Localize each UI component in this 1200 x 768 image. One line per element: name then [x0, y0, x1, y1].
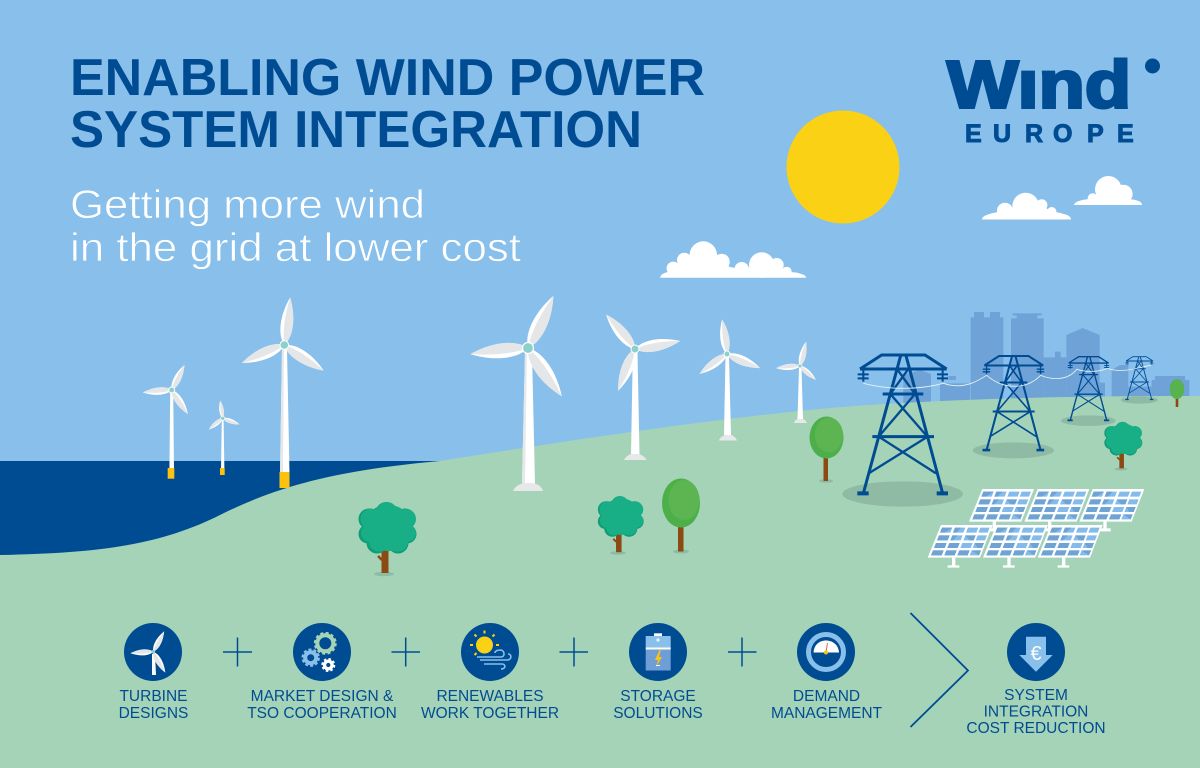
turbine 7 onshore — [776, 341, 818, 423]
pylons and power lines — [842, 355, 1158, 507]
sea — [0, 461, 560, 571]
cloud: right upper — [1074, 176, 1142, 205]
label: STORAGE — [620, 688, 696, 705]
title: ENABLING WIND POWER — [70, 49, 705, 107]
ground — [0, 396, 1200, 768]
trees: green round — [662, 379, 1184, 554]
label: TURBINE — [119, 688, 188, 705]
icon: battery — [629, 623, 687, 681]
title: SYSTEM INTEGRATION — [70, 101, 642, 159]
arrow: chevron — [910, 613, 968, 727]
title — [70, 49, 705, 159]
label: WORK TOGETHER — [421, 705, 559, 722]
step: storage solutions — [613, 623, 703, 722]
step: turbine designs — [119, 623, 188, 722]
subtitle: in the grid at lower cost — [70, 226, 521, 270]
turbine 3 offshore — [240, 297, 327, 488]
trees: teal — [358, 422, 1142, 576]
turbine 2 offshore — [207, 400, 240, 475]
plus signs — [223, 638, 756, 666]
label: INTEGRATION — [984, 704, 1088, 720]
icon: gauge — [797, 623, 855, 681]
label: COST REDUCTION — [966, 720, 1106, 737]
solar panel supports back row — [987, 522, 1111, 531]
label: DESIGNS — [119, 705, 188, 722]
pylon 2 — [983, 356, 1044, 450]
label: SOLUTIONS — [613, 705, 703, 722]
logo: WindEurope: Wind — [947, 48, 1131, 122]
sun — [786, 110, 900, 224]
label: MARKET DESIGN & — [251, 688, 394, 705]
subtitle — [70, 183, 521, 270]
icon: sun and wind — [461, 623, 519, 681]
turbine 1 offshore — [142, 363, 191, 479]
pylon 4 — [1125, 357, 1153, 400]
label: RENEWABLES — [436, 688, 544, 705]
result: system integration cost reduction — [966, 623, 1106, 737]
pylon shadows — [842, 396, 1158, 507]
cloud: right lower — [982, 193, 1071, 220]
label: TSO COOPERATION — [247, 705, 397, 722]
logo: WindEurope — [947, 48, 1160, 148]
icon: turbine — [124, 623, 182, 681]
turbine 5 onshore — [602, 311, 681, 460]
label: DEMAND — [793, 688, 860, 705]
subtitle: Getting more wind — [70, 183, 425, 227]
city skyline — [903, 312, 1189, 407]
solar panel supports front row — [948, 558, 1069, 568]
icon: euro down arrow: € — [1030, 643, 1042, 665]
solar panels — [928, 489, 1144, 568]
solar panels back row — [969, 489, 1144, 522]
pylon 3 — [1067, 357, 1109, 420]
pylon 1 — [857, 355, 948, 493]
power lines — [863, 365, 1152, 388]
step: demand management — [771, 623, 883, 722]
turbine 4 onshore large — [470, 293, 568, 491]
icon: gears — [293, 623, 351, 681]
step: market design and TSO cooperation — [247, 623, 397, 722]
turbine 6 onshore — [697, 319, 762, 440]
step: renewables work together — [421, 623, 559, 722]
label: SYSTEM — [1004, 687, 1068, 704]
logo: WindEurope: EUROPE — [965, 120, 1134, 148]
label: MANAGEMENT — [771, 705, 883, 722]
cloud: centre — [660, 241, 806, 278]
solar panels front row — [928, 525, 1103, 558]
